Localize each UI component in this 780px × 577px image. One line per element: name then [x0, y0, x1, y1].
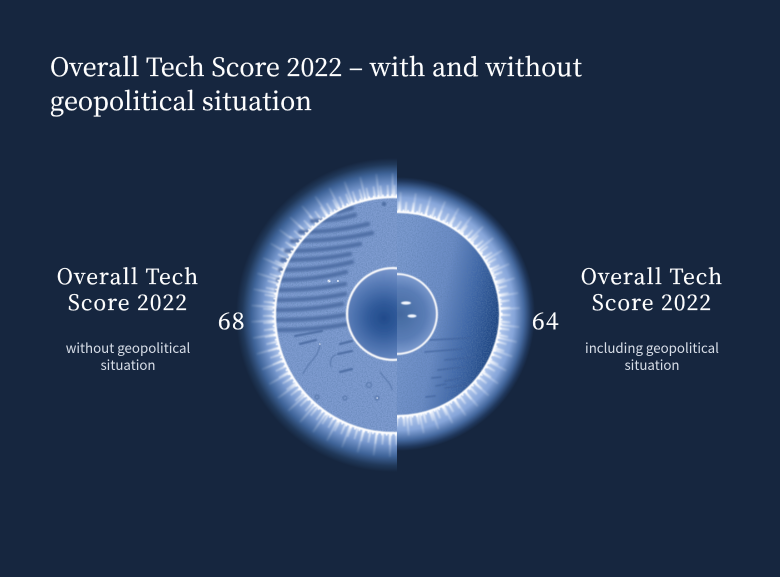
right half: including geopolitical situation	[397, 178, 534, 450]
title	[50, 48, 582, 118]
right radial spikes	[397, 192, 520, 436]
left lower marks	[295, 331, 352, 372]
left label: Overall Tech	[57, 261, 199, 291]
left sublabel: situation	[100, 355, 156, 374]
right label: Overall Tech	[581, 261, 723, 291]
title: Overall Tech Score 2022 – with and without	[50, 48, 582, 84]
right inner disc	[397, 272, 439, 356]
right glow	[397, 178, 534, 450]
left label: Score 2022	[68, 287, 188, 317]
left sublabel	[66, 338, 190, 374]
left inner disc	[345, 266, 397, 362]
left radial spikes	[252, 173, 397, 457]
right cover of left glow	[397, 150, 547, 480]
right disc	[397, 212, 500, 416]
title: geopolitical situation	[50, 82, 312, 118]
left dark stripes	[276, 208, 372, 330]
chart: split circular score graphic	[238, 160, 534, 470]
right outer ring	[397, 209, 503, 419]
left glow	[238, 160, 397, 470]
left disc grain	[276, 198, 397, 432]
right dark stripes	[424, 338, 463, 398]
left sublabel: without geopolitical	[66, 338, 190, 357]
value: 68: 68	[218, 303, 246, 336]
right label: Score 2022	[592, 287, 712, 317]
right sublabel: situation	[624, 355, 680, 374]
right sublabel	[585, 338, 719, 374]
right sublabel: including geopolitical	[585, 338, 719, 357]
right label	[581, 261, 723, 317]
left label	[57, 261, 199, 317]
left outer ring	[272, 194, 397, 436]
value: 64: 64	[532, 303, 560, 336]
left disc	[276, 198, 397, 432]
right bright highlights	[401, 301, 416, 318]
left scratches and spots	[303, 202, 392, 400]
right disc grain	[397, 210, 502, 420]
left half: without geopolitical situation	[238, 160, 397, 470]
